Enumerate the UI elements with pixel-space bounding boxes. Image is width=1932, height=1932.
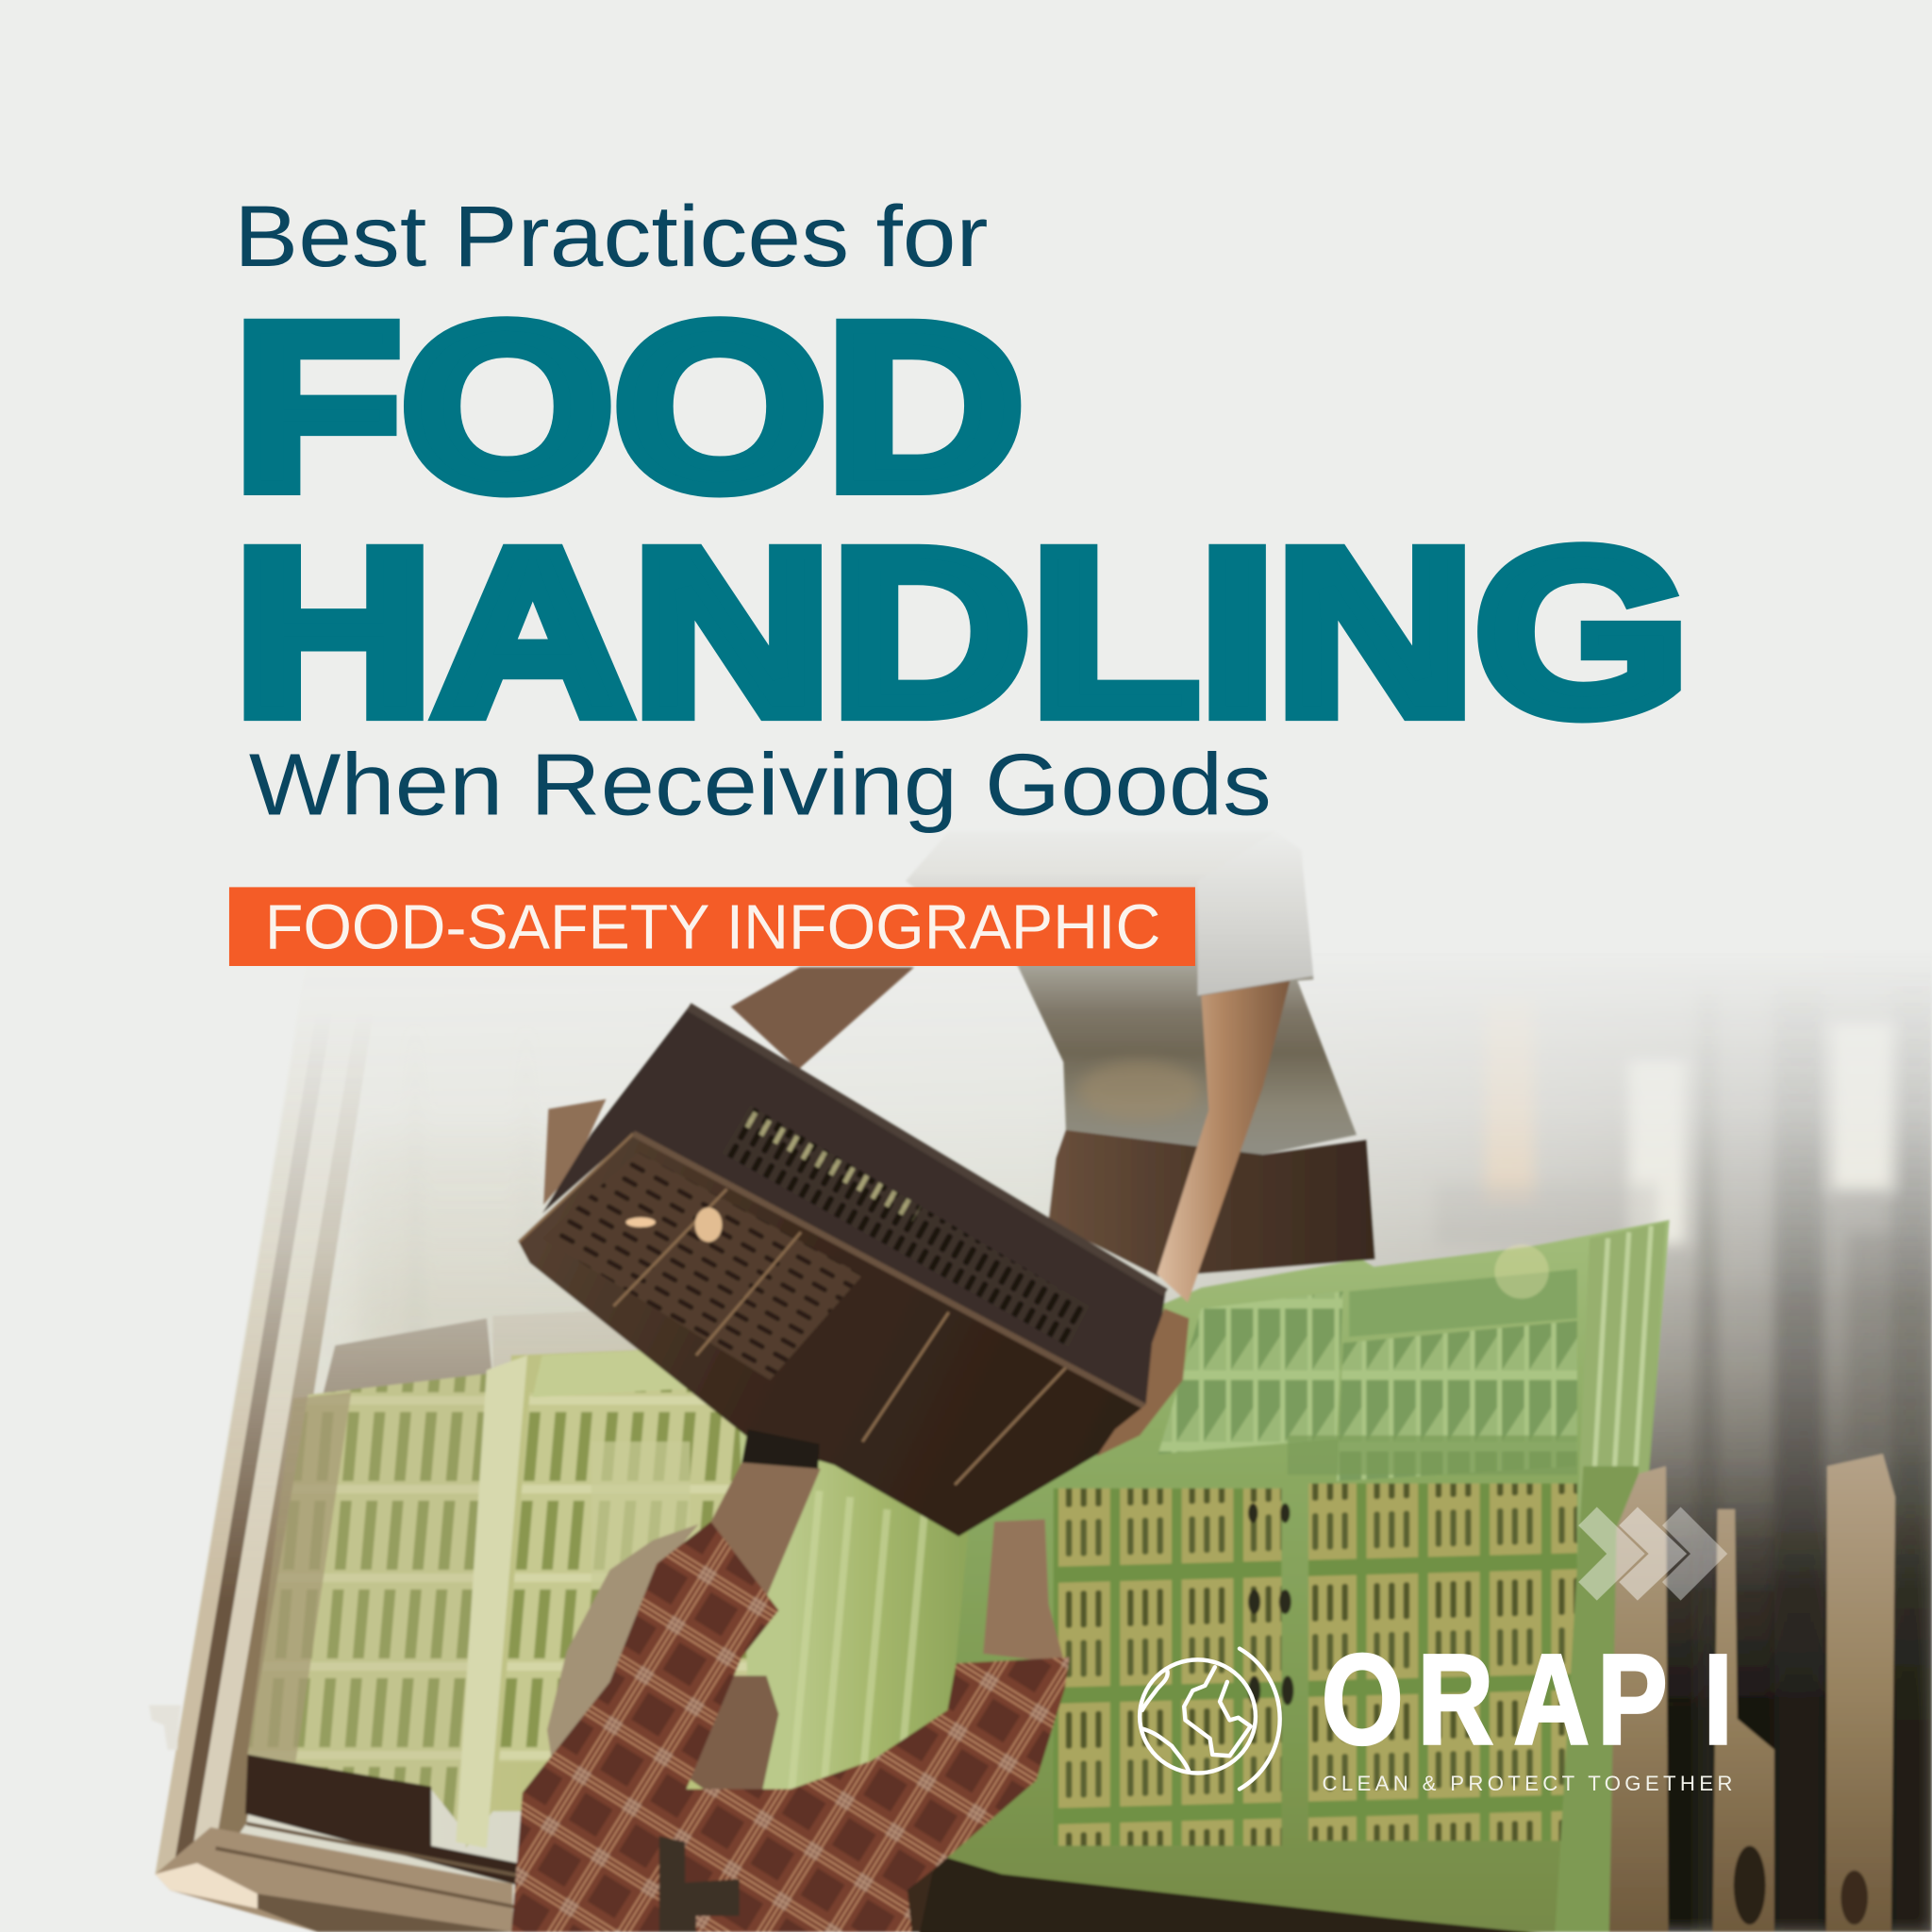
slotted side bbox=[722, 1106, 1090, 1347]
wooden floor boards bbox=[156, 1824, 518, 1932]
subheading: when receiving goods: When Receiving Goods bbox=[249, 735, 1272, 833]
lower crate slit panels bbox=[1054, 1489, 1281, 1846]
shirt stains bbox=[1078, 1061, 1201, 1120]
heading: HANDLING: HANDLING bbox=[234, 500, 1690, 763]
dark floor behind lower worker bbox=[641, 1811, 937, 1932]
side wall bbox=[542, 1007, 1166, 1411]
t-shirt torso bbox=[906, 832, 1357, 1155]
lens flare on crate bbox=[1494, 1244, 1549, 1299]
brown plastic crate bbox=[519, 1007, 1166, 1537]
heading: best practices: Best Practices for bbox=[234, 189, 989, 285]
sleeve bbox=[1198, 832, 1313, 995]
left forearm bbox=[711, 1462, 821, 1597]
backpack strap bbox=[659, 1836, 740, 1932]
right forearm bbox=[983, 1519, 1064, 1663]
left cuff bbox=[741, 1429, 820, 1469]
light slots bbox=[749, 1119, 917, 1214]
green slatted crate side bbox=[740, 1417, 998, 1873]
bottom face bbox=[519, 1134, 1146, 1537]
right side pillars and shadows bbox=[1429, 986, 1932, 1932]
heading: FOOD: FOOD bbox=[234, 275, 1024, 538]
truck interior wall bbox=[207, 986, 1932, 1932]
wooden posts bbox=[1609, 1454, 1895, 1932]
far hand bbox=[543, 1099, 607, 1205]
rib lines bbox=[519, 1134, 1066, 1485]
left sleeve bbox=[511, 1522, 778, 1932]
straw hat bbox=[547, 1524, 699, 1762]
icon: globe bbox=[1140, 1649, 1280, 1789]
crate connector holes bbox=[1248, 1503, 1293, 1706]
tagline: CLEAN & PROTECT TOGETHER bbox=[1322, 1772, 1732, 1795]
dark floor gap bbox=[245, 1755, 518, 1885]
shirt body bbox=[641, 1774, 912, 1932]
wall shadow and panel lines bbox=[155, 1053, 638, 1874]
bottom slot texture bbox=[542, 1152, 862, 1380]
far arm bbox=[731, 967, 914, 1070]
face and neck bbox=[687, 1675, 778, 1827]
photo: truck unloading scene bbox=[149, 832, 1932, 1932]
crate rim bbox=[689, 1007, 1166, 1292]
lens flare dots bbox=[695, 1208, 722, 1242]
logo: ORAPI bbox=[1140, 1629, 1733, 1795]
right sleeve bbox=[791, 1657, 1070, 1915]
icon: chevron arrows bbox=[1578, 1507, 1727, 1601]
upper worker bbox=[543, 832, 1375, 1303]
door bracket bbox=[149, 1706, 181, 1750]
middle yellow-green crate bbox=[456, 1345, 789, 1848]
left door frame bbox=[156, 974, 323, 1874]
large green crate bbox=[930, 1220, 1670, 1932]
wordmark: ORAPI bbox=[1322, 1629, 1733, 1772]
orange banner: FOOD-SAFETY INFOGRAPHIC bbox=[265, 893, 1160, 963]
upper crate cells bbox=[1158, 1291, 1343, 1454]
left pale crate bbox=[248, 1374, 487, 1836]
near hand on crate bbox=[1096, 1308, 1189, 1457]
shorts bbox=[1049, 1130, 1375, 1276]
dark ground under crates bbox=[918, 1855, 1611, 1932]
lower worker bbox=[511, 1429, 1070, 1932]
near arm bbox=[1157, 981, 1291, 1303]
